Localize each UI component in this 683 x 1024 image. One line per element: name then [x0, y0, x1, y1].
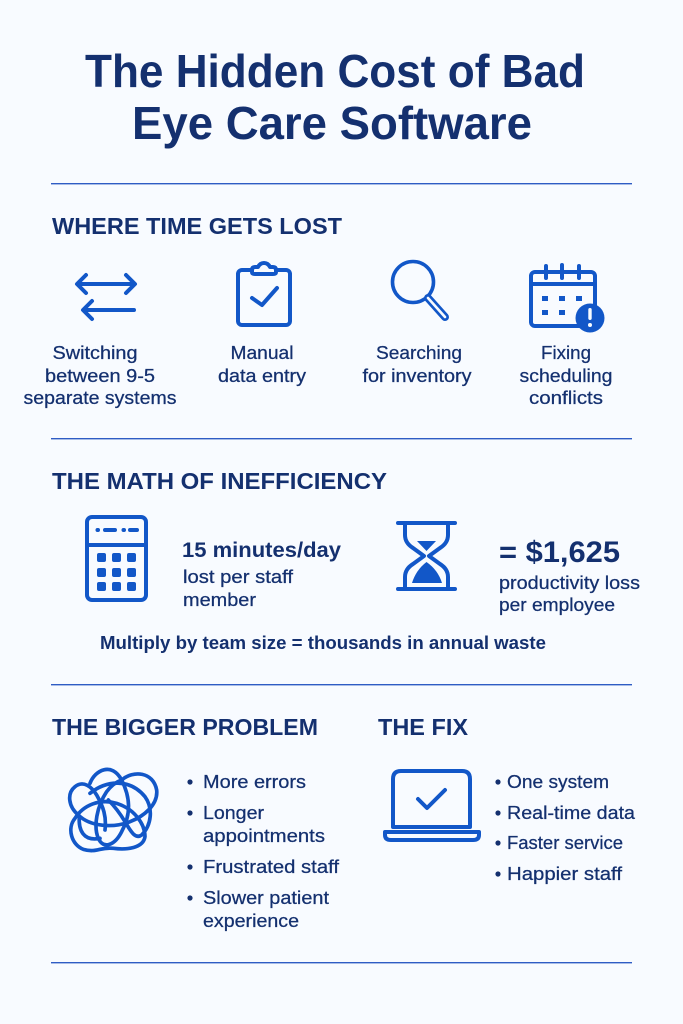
list: problems: Longer — [203, 803, 264, 823]
icon: laptop with check — [385, 771, 479, 840]
list: problems: Frustrated staff — [203, 857, 340, 877]
list: fixes: Faster service — [507, 833, 623, 853]
list: fixes: Happier staff — [507, 864, 623, 884]
heading: the fix: THE FIX — [378, 714, 469, 740]
stat: 15 minutes per day: member — [183, 590, 256, 610]
stat: 1,625 dollars: per employee — [499, 595, 615, 615]
panel: where time gets lost — [24, 213, 612, 408]
icon: hourglass — [398, 523, 455, 589]
text: searching for inventory: for inventory — [362, 366, 472, 386]
text: switching systems — [24, 343, 176, 408]
icon: clipboard with check — [238, 263, 290, 325]
title — [85, 45, 585, 149]
stat: 15 minutes per day — [182, 539, 341, 610]
list: fixes: Real-time data — [507, 803, 636, 823]
stat: 15 minutes per day: lost per staff — [183, 567, 294, 587]
title: The Hidden Cost of Bad — [85, 45, 585, 97]
text: manual data entry — [218, 343, 306, 386]
panel: the fix — [378, 714, 636, 884]
icon: tangled lines — [70, 769, 157, 851]
text: manual data entry: Manual — [230, 343, 294, 363]
list: problems — [187, 772, 340, 931]
text: fixing scheduling conflicts — [520, 343, 612, 408]
list: problems: experience — [203, 911, 299, 931]
list: fixes: One system — [507, 772, 609, 792]
list: problems: Slower patient — [203, 888, 329, 908]
text: fixing scheduling conflicts: conflicts — [529, 388, 603, 408]
stat: 1,625 dollars — [499, 536, 640, 615]
list: problems: appointments — [203, 826, 325, 846]
text: switching systems: separate systems — [24, 388, 176, 408]
heading: the bigger problem: THE BIGGER PROBLEM — [52, 714, 318, 740]
text: fixing scheduling conflicts: Fixing — [541, 343, 591, 363]
heading: where time gets lost: WHERE TIME GETS LOST — [52, 213, 342, 239]
list: problems: More errors — [203, 772, 306, 792]
panel: math of inefficiency — [52, 468, 640, 653]
title: Eye Care Software — [132, 97, 532, 149]
stat: 15 minutes per day: 15 minutes/day — [182, 539, 341, 562]
callout: annual waste: Multiply by team size = thousands in annual waste — [100, 633, 546, 653]
stat: 1,625 dollars: = $1,625 — [499, 536, 620, 569]
text: searching for inventory — [362, 343, 472, 386]
text: searching for inventory: Searching — [376, 343, 462, 363]
icon: magnifying glass — [392, 262, 445, 317]
icon: switching arrows — [77, 275, 135, 319]
icon: calculator — [87, 517, 146, 600]
panel: the bigger problem — [52, 714, 340, 931]
icon: calendar with alert — [531, 265, 604, 332]
text: switching systems: between 9-5 — [45, 366, 155, 386]
text: manual data entry: data entry — [218, 366, 306, 386]
heading: math of inefficiency: THE MATH OF INEFFICIENCY — [52, 468, 387, 494]
list: fixes — [495, 772, 636, 884]
stat: 1,625 dollars: productivity loss — [499, 573, 640, 593]
text: switching systems: Switching — [52, 343, 138, 363]
text: fixing scheduling conflicts: scheduling — [520, 366, 612, 386]
